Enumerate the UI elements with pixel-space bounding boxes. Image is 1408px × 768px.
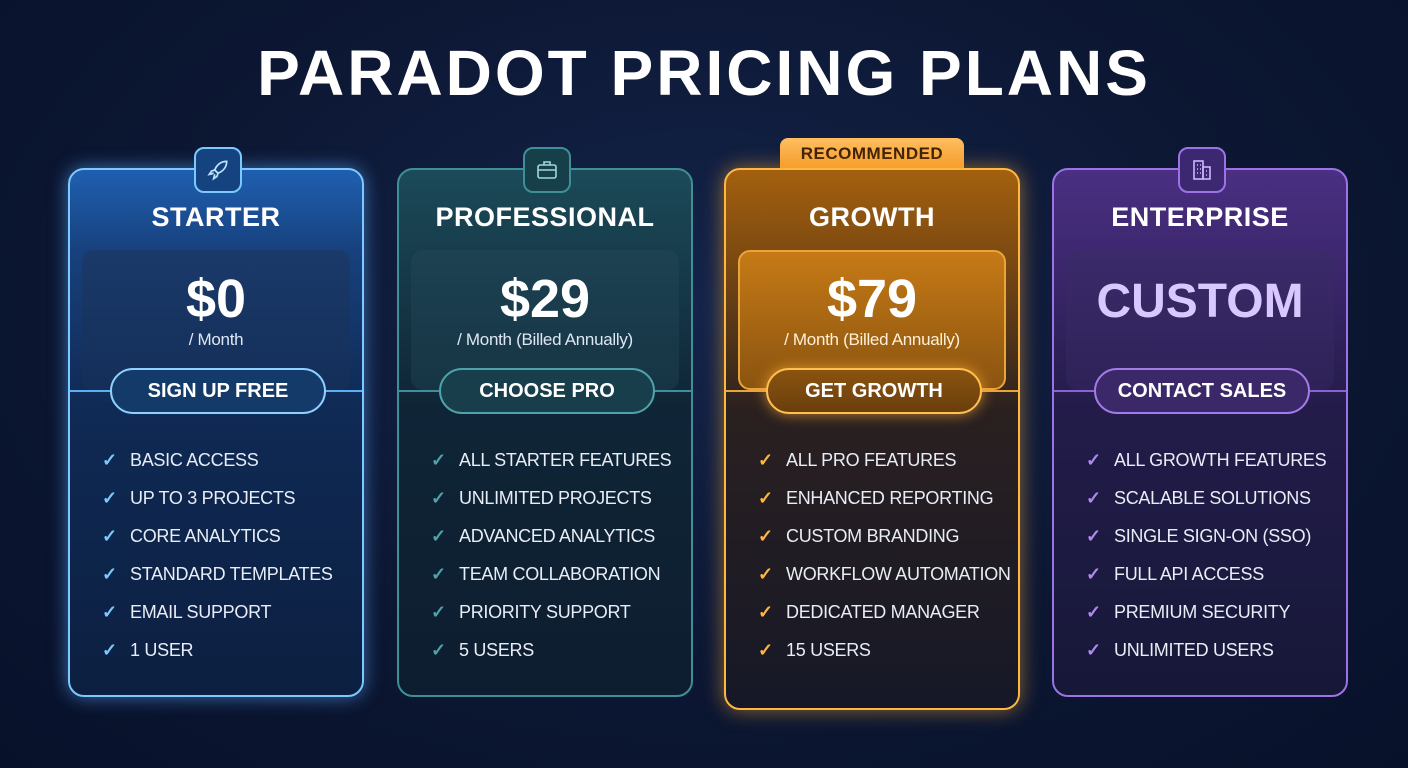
- feature list: ✓: [431, 640, 446, 660]
- feature list: 1 USER: [130, 640, 193, 660]
- heading: GROWTH: [809, 202, 935, 232]
- price: $29: [500, 269, 590, 329]
- feature list: UP TO 3 PROJECTS: [130, 488, 295, 508]
- feature list: CUSTOM BRANDING: [786, 526, 959, 546]
- feature list: ✓: [758, 450, 773, 470]
- feature list: ✓: [102, 564, 117, 584]
- badge: recommended: [780, 138, 964, 170]
- button: CONTACT SALES: [1118, 380, 1286, 402]
- feature list: ✓: [1086, 526, 1101, 546]
- feature list: CORE ANALYTICS: [130, 526, 281, 546]
- feature list: ✓: [1086, 640, 1101, 660]
- feature list: EMAIL SUPPORT: [130, 602, 271, 622]
- feature list: ENHANCED REPORTING: [786, 488, 993, 508]
- panel: growth: [724, 168, 1020, 710]
- button: SIGN UP FREE: [148, 380, 288, 402]
- feature list: ✓: [1086, 488, 1101, 508]
- heading: ENTERPRISE: [1111, 202, 1289, 232]
- heading: PROFESSIONAL: [435, 202, 655, 232]
- feature list: ✓: [431, 526, 446, 546]
- feature list: ✓: [431, 564, 446, 584]
- price: $79: [827, 269, 917, 329]
- title: PARADOT PRICING PLANS: [257, 37, 1151, 109]
- feature list: SINGLE SIGN-ON (SSO): [1114, 526, 1311, 546]
- feature list: ALL GROWTH FEATURES: [1114, 450, 1326, 470]
- feature list: SCALABLE SOLUTIONS: [1114, 488, 1311, 508]
- feature list: ✓: [431, 602, 446, 622]
- feature list: ALL PRO FEATURES: [786, 450, 956, 470]
- icon: building: [1178, 147, 1226, 193]
- button: [110, 368, 326, 414]
- panel: starter: [68, 168, 364, 697]
- feature list: ✓: [431, 450, 446, 470]
- panel: professional: [397, 168, 693, 697]
- feature list: FULL API ACCESS: [1114, 564, 1264, 584]
- feature list: ✓: [758, 488, 773, 508]
- feature list: [1086, 450, 1326, 660]
- feature list: ✓: [102, 640, 117, 660]
- feature list: ✓: [758, 602, 773, 622]
- feature list: TEAM COLLABORATION: [459, 564, 660, 584]
- feature list: 15 USERS: [786, 640, 871, 660]
- feature list: UNLIMITED PROJECTS: [459, 488, 652, 508]
- button: [1094, 368, 1310, 414]
- feature list: 5 USERS: [459, 640, 534, 660]
- panel: enterprise: [1052, 168, 1348, 697]
- feature list: ✓: [1086, 450, 1101, 470]
- feature list: PREMIUM SECURITY: [1114, 602, 1290, 622]
- feature list: BASIC ACCESS: [130, 450, 258, 470]
- feature list: WORKFLOW AUTOMATION: [786, 564, 1011, 584]
- feature list: ✓: [758, 564, 773, 584]
- button: [439, 368, 655, 414]
- feature list: [102, 450, 333, 660]
- feature list: ✓: [758, 640, 773, 660]
- feature list: ✓: [1086, 564, 1101, 584]
- panel: starter: / Month: [189, 330, 243, 349]
- feature list: ✓: [102, 526, 117, 546]
- feature list: ✓: [431, 488, 446, 508]
- heading: STARTER: [152, 202, 280, 232]
- panel: professional: / Month (Billed Annually): [457, 330, 633, 349]
- feature list: ADVANCED ANALYTICS: [459, 526, 655, 546]
- icon: rocket: [194, 147, 242, 193]
- button: GET GROWTH: [805, 380, 943, 402]
- feature list: ALL STARTER FEATURES: [459, 450, 671, 470]
- feature list: ✓: [102, 488, 117, 508]
- panel: growth: / Month (Billed Annually): [784, 330, 960, 349]
- feature list: ✓: [1086, 602, 1101, 622]
- feature list: [758, 450, 1011, 660]
- feature list: [431, 450, 671, 660]
- price: CUSTOM: [1096, 275, 1304, 328]
- feature list: ✓: [102, 602, 117, 622]
- button: [766, 368, 982, 414]
- feature list: UNLIMITED USERS: [1114, 640, 1274, 660]
- feature list: ✓: [758, 526, 773, 546]
- icon: briefcase: [523, 147, 571, 193]
- feature list: PRIORITY SUPPORT: [459, 602, 631, 622]
- feature list: STANDARD TEMPLATES: [130, 564, 333, 584]
- price: $0: [186, 269, 246, 329]
- feature list: DEDICATED MANAGER: [786, 602, 980, 622]
- button: CHOOSE PRO: [479, 380, 615, 402]
- feature list: ✓: [102, 450, 117, 470]
- badge: recommended: RECOMMENDED: [801, 144, 943, 163]
